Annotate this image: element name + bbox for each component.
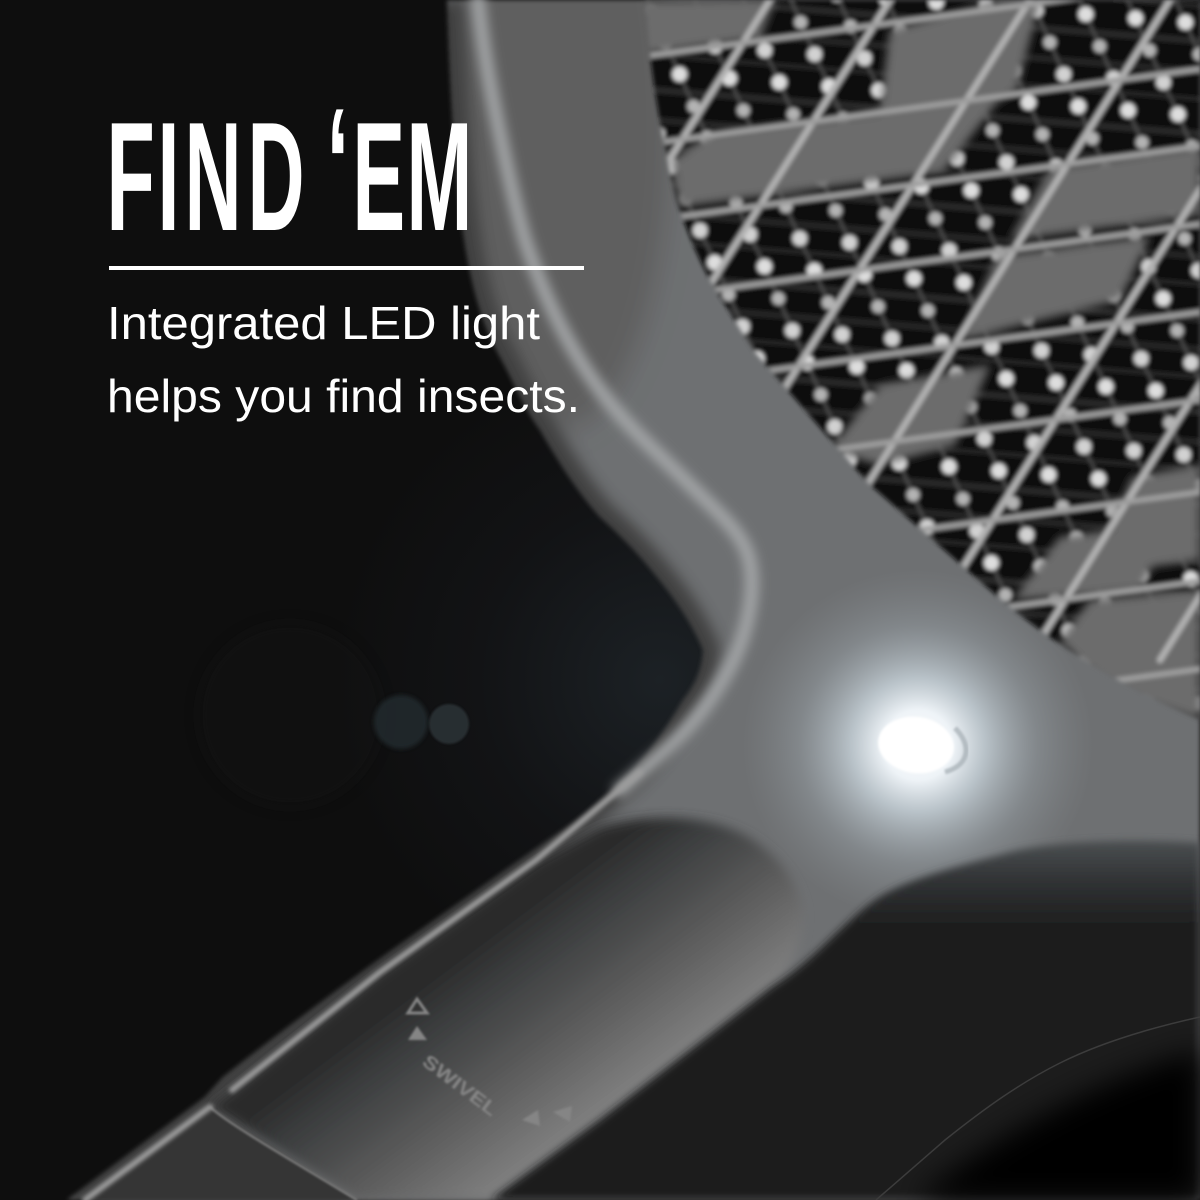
description: Integrated LED light: [107, 297, 540, 349]
frame fibres: [664, 0, 1200, 666]
description: [107, 297, 580, 422]
frame outer edge shadow: [67, 0, 703, 1200]
frame highlight ridge: [478, 0, 752, 790]
LED socket: [945, 728, 966, 772]
embossed swivel marking: [408, 999, 572, 1126]
embossed swivel marking: SWIVEL: [418, 1051, 501, 1121]
seam line: [210, 1107, 357, 1200]
arm highlight ridge: [85, 772, 640, 1200]
electric mesh: [645, 0, 1200, 720]
rubber grip: [491, 841, 1200, 1200]
lens flare circles: [198, 623, 469, 807]
grip black core: [915, 1050, 1200, 1200]
grey fibre patches: [640, 0, 1200, 720]
divider under title: [109, 266, 584, 270]
LED glow: [742, 569, 1094, 921]
LED light: [874, 712, 958, 778]
arm panel: [210, 818, 803, 1200]
grip contour line: [876, 1017, 1200, 1200]
title: FIND ‘EM: [106, 77, 472, 264]
panel left of seam: [85, 1107, 357, 1200]
description: helps you find insects.: [107, 370, 580, 422]
